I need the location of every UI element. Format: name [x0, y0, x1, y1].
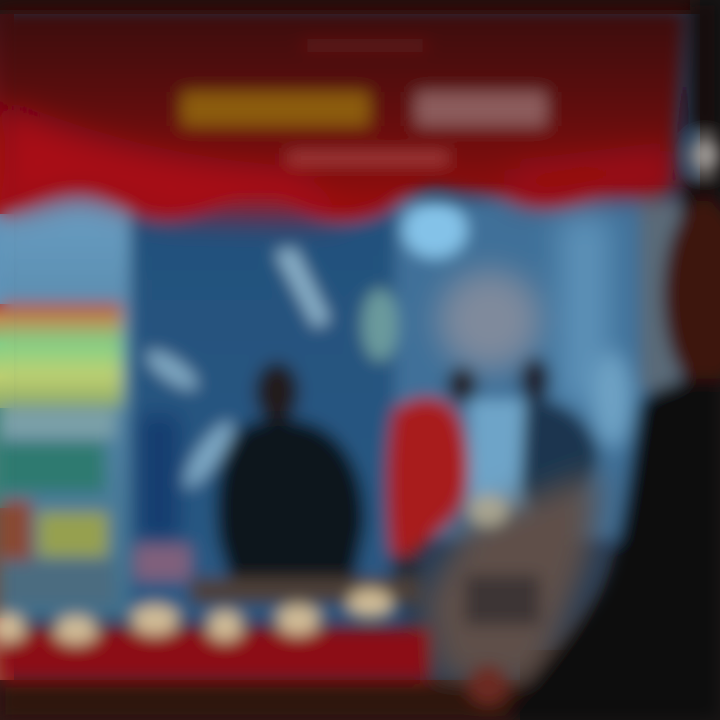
red and white food row [0, 589, 430, 680]
bottom counter [0, 684, 540, 720]
red base [0, 628, 430, 680]
blue stall back wall [0, 190, 680, 620]
banner heading [182, 42, 546, 163]
wall highlights [138, 202, 632, 540]
person in navy [520, 358, 598, 515]
left screen and shelves [0, 303, 190, 605]
counter items [190, 470, 600, 690]
red banner with scalloped edge [0, 10, 685, 222]
person in red [387, 367, 477, 600]
white tops [0, 589, 392, 644]
foreground figure [468, 0, 720, 720]
person in black [216, 362, 365, 600]
